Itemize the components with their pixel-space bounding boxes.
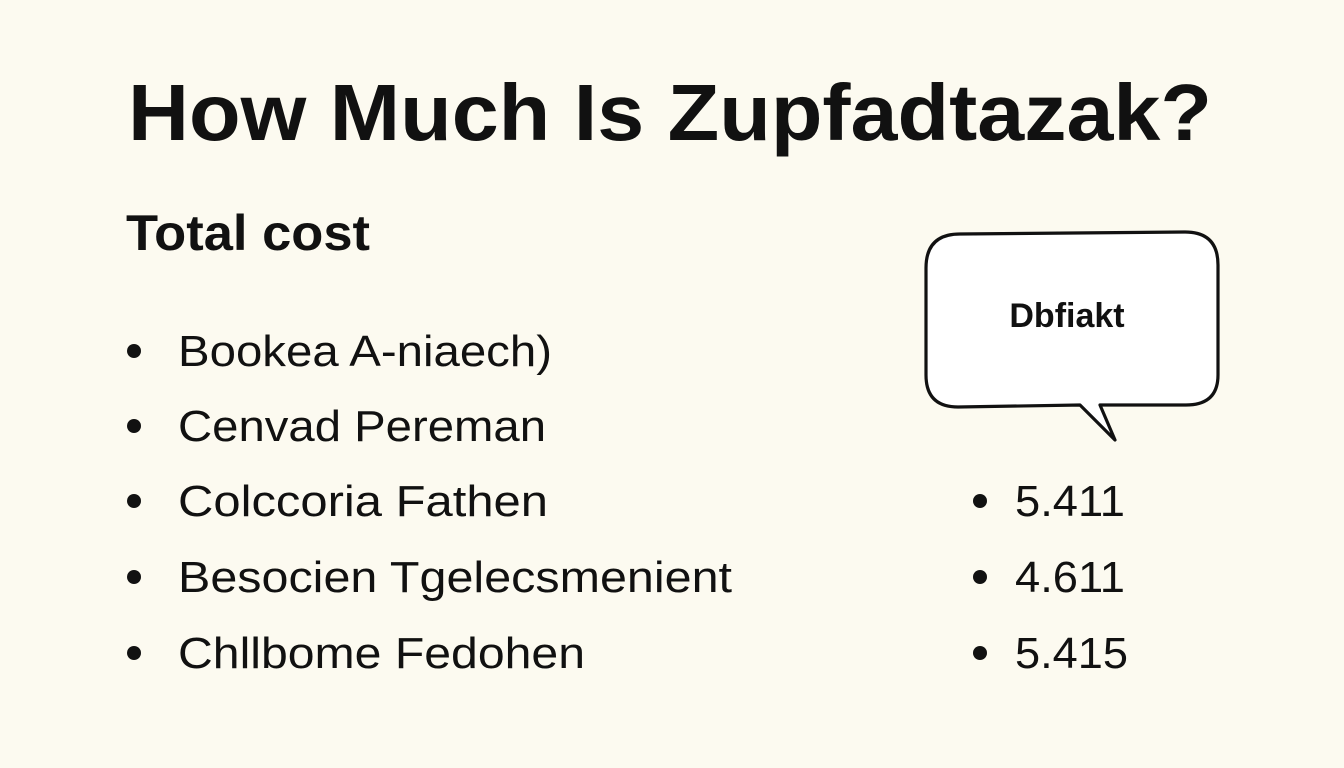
list: values: 5.415: [1015, 629, 1128, 678]
list: cost items: [127, 327, 732, 678]
list: cost items: Cenvad Pereman: [178, 402, 546, 451]
list: values: 4.611: [1015, 553, 1125, 602]
subheading: total cost: Total cost: [126, 205, 370, 261]
list: values: 5.411: [1015, 477, 1125, 526]
list: cost items: Colccoria Fathen: [178, 477, 548, 526]
list: cost items: Besocien Tgelecsmenient: [178, 553, 732, 602]
title: How Much Is Zupfadtazak?: [128, 68, 1212, 157]
list: values: [973, 477, 1128, 678]
list: cost items: Chllbome Fedohen: [178, 629, 585, 678]
speech bubble callout: [926, 232, 1218, 440]
list: cost items: Bookea A-niaech): [178, 327, 552, 376]
speech bubble callout: Dbfiakt: [1009, 297, 1125, 335]
